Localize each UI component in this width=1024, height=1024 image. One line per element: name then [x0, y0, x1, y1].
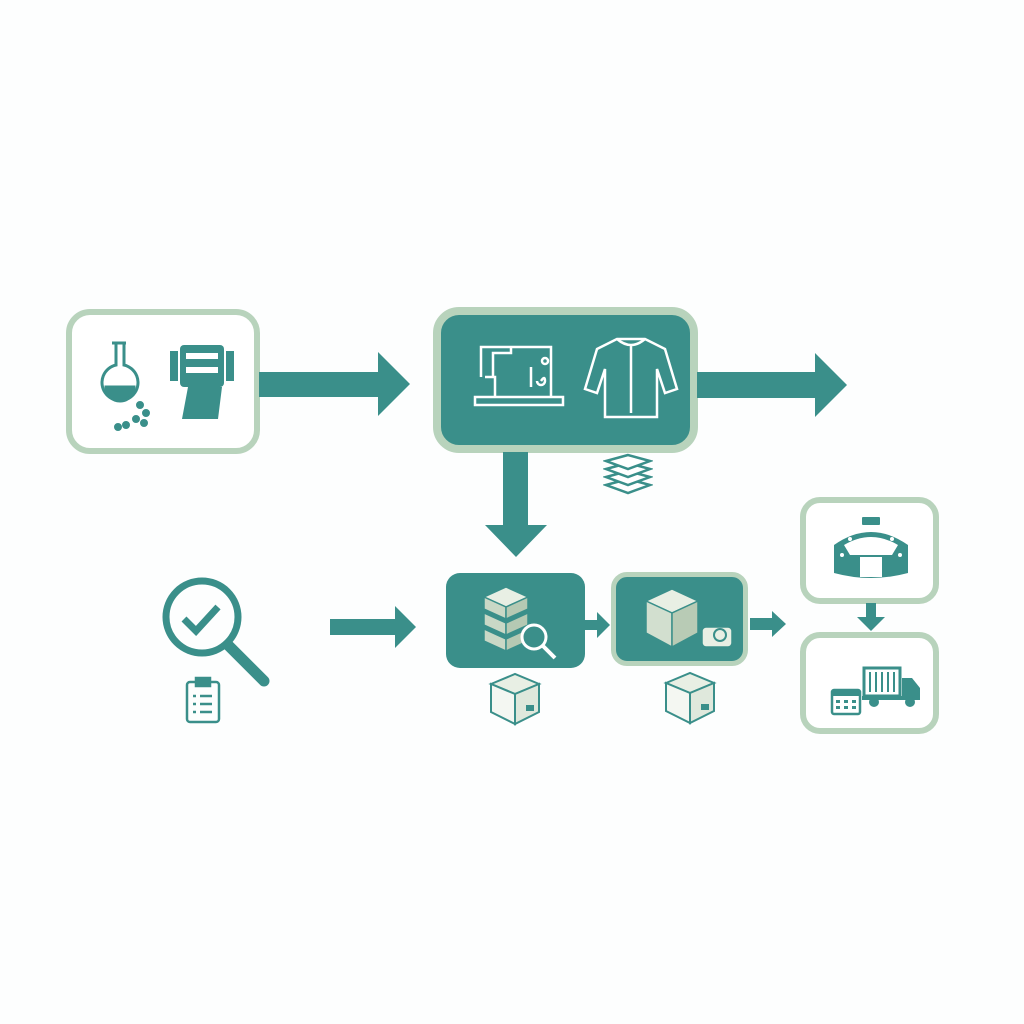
panel: inspection	[446, 573, 585, 668]
panel: packing	[611, 572, 748, 666]
icon: calendar	[830, 688, 862, 716]
icon: truck	[862, 666, 920, 707]
icon: fabric roller	[170, 345, 234, 419]
icon: sewing machine	[474, 346, 564, 406]
arrow: inspection to packing	[585, 612, 610, 638]
icon: clipboard	[186, 676, 220, 724]
icon: package with tape	[646, 590, 732, 646]
icon: box below packing	[664, 672, 716, 725]
arrow: packing to distribution	[750, 611, 786, 637]
panel: raw materials	[66, 309, 260, 454]
icon: flask	[100, 342, 150, 431]
arrow: down	[485, 452, 547, 557]
icon: stacked boxes with magnifier	[484, 588, 556, 660]
icon: stadium	[834, 517, 908, 578]
panel: stadium	[800, 497, 939, 604]
arrow: production to right	[697, 353, 847, 417]
panel: sewing production	[433, 307, 698, 453]
arrow: check to inspection	[330, 606, 416, 648]
arrow: stadium down to delivery	[857, 603, 885, 631]
icon: quality check magnifier	[162, 578, 270, 686]
arrow: raw to production	[259, 352, 410, 416]
icon: fabric layers	[603, 454, 653, 494]
icon: box below inspection	[488, 672, 542, 726]
panel: delivery	[800, 632, 939, 734]
icon: jacket	[584, 338, 678, 418]
